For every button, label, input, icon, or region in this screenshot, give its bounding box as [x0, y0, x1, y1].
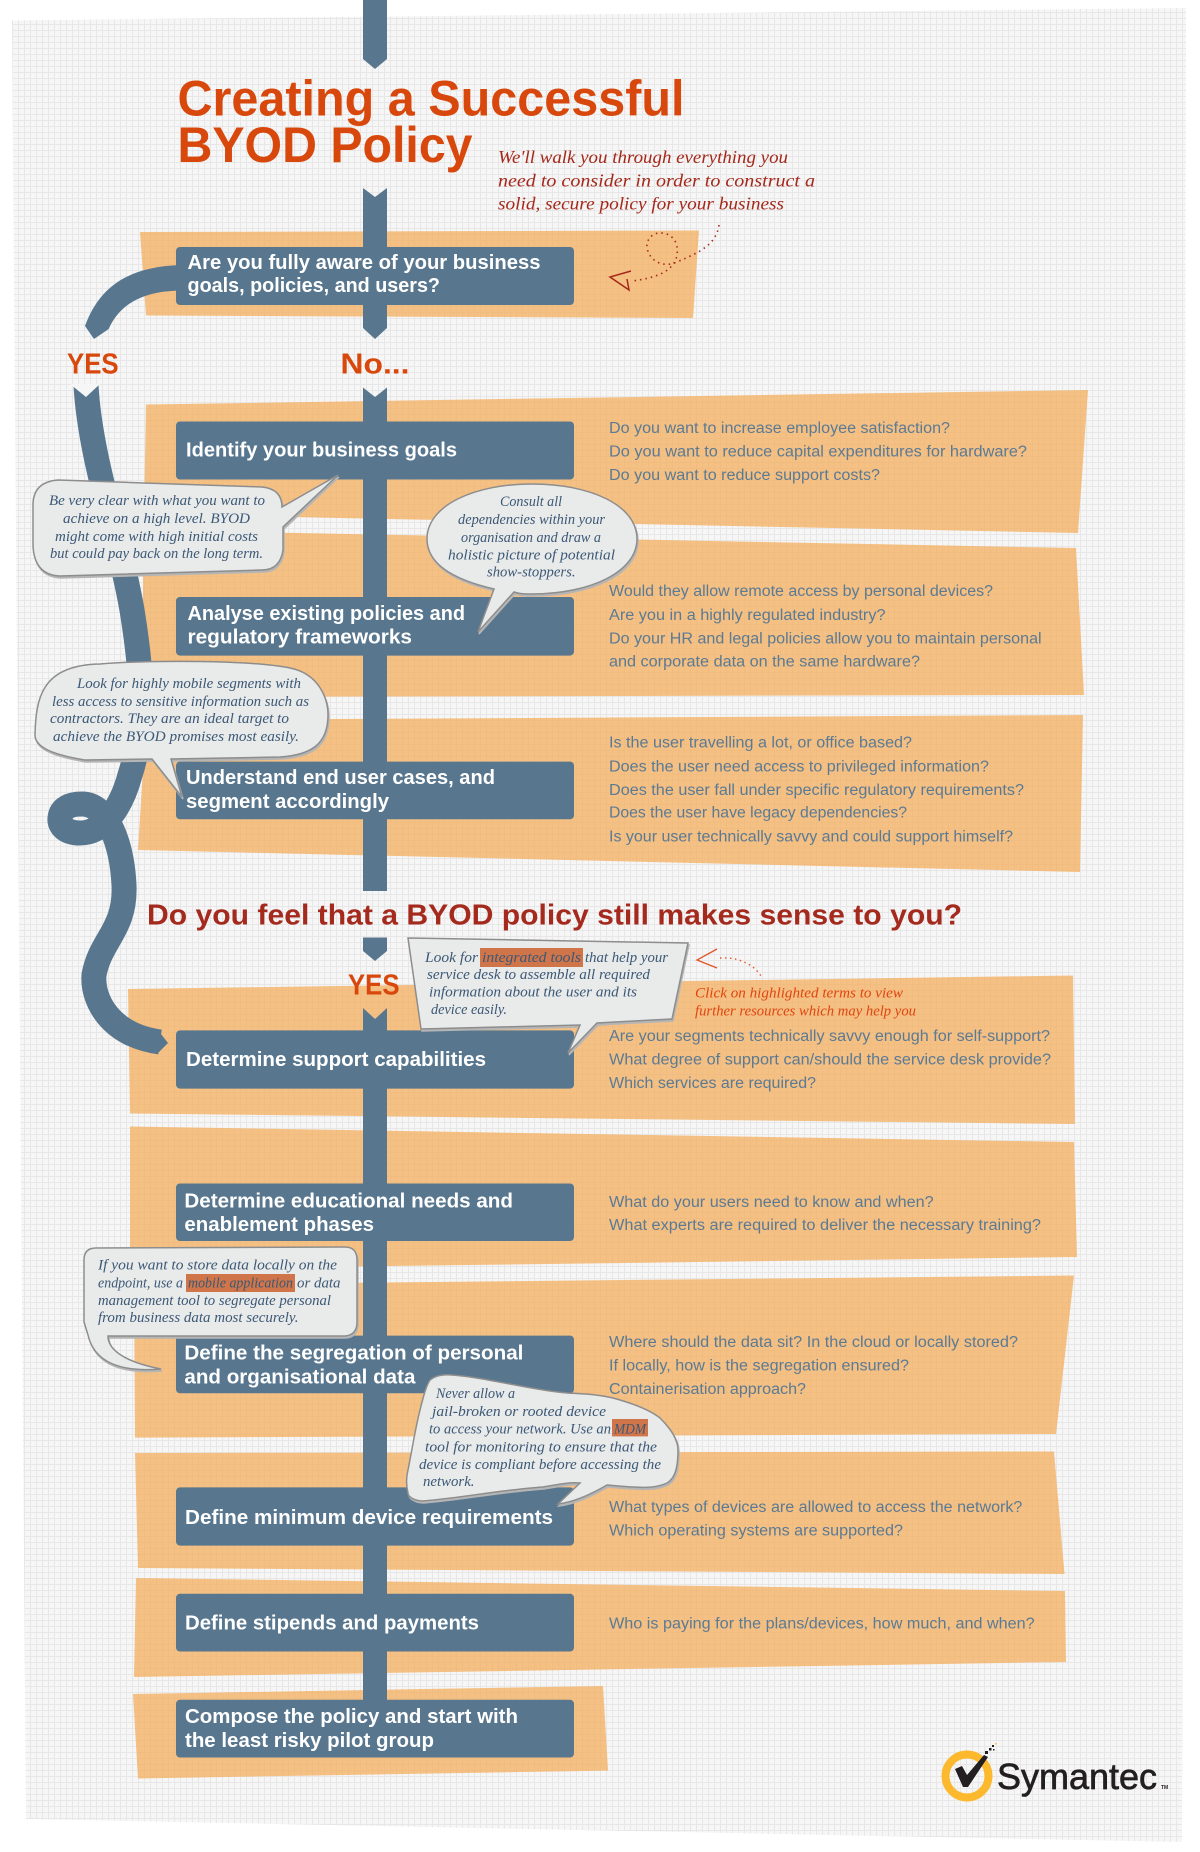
step box: end user cases: segment accordingly: [186, 791, 390, 813]
callout: integrated tools: device easily.: [431, 1002, 507, 1018]
panel: device requirements backing: [135, 1452, 1064, 1574]
step box: compose policy: the least risky pilot group: [185, 1730, 434, 1752]
questions: devices: Which operating systems are supported?: [609, 1522, 903, 1539]
intro handwritten text: need to consider in order to construct a: [498, 171, 815, 191]
highlight: mobile application: [186, 1274, 295, 1292]
callout: local data storage: from business data most securely.: [98, 1310, 298, 1326]
callout: never allow jail-broken device: tool for monitoring to ensure that the: [425, 1440, 657, 1456]
heading: decision question: Do you feel that a BYOD policy still makes sense to you?: [147, 900, 962, 932]
callout: local data storage: mobile application: [188, 1275, 293, 1291]
questions: stipends: Who is paying for the plans/devices, how much, and when?: [609, 1616, 1035, 1633]
questions: education: What experts are required to deliver the necessary training?: [609, 1217, 1041, 1234]
callout: consult all dependencies: dependencies within your: [458, 512, 605, 528]
icon: dotted looping arrow: [610, 225, 719, 290]
title: [178, 70, 684, 173]
panel: data segregation backing: [134, 1276, 1074, 1438]
callout: consult all dependencies: [427, 484, 637, 632]
note: click on highlighted terms: Click on highlighted terms to view: [695, 986, 903, 1002]
label: YES: YES: [67, 349, 119, 381]
panel: educational needs backing: [130, 1126, 1077, 1270]
arrow: title to first question: [363, 188, 387, 339]
callout: be very clear: but could pay back on the long term.: [50, 546, 263, 562]
callout: integrated tools: [408, 938, 688, 1053]
arrow: into yes label: [363, 938, 387, 961]
questions: business goals: Do you want to reduce capital expenditures for hardware?: [609, 444, 1027, 461]
questions: policies: Would they allow remote access by personal devices?: [609, 583, 993, 600]
intro handwritten text: We'll walk you through everything you: [498, 147, 788, 167]
step box: educational needs: enablement phases: [184, 1214, 374, 1236]
questions: business goals: [609, 420, 1027, 484]
highlight: MDM: [612, 1419, 648, 1436]
questions: business goals: Do you want to increase employee satisfaction?: [609, 420, 950, 437]
callout: be very clear: achieve on a high level. BYOD: [63, 511, 250, 527]
callout: never allow jail-broken device: to access your network. Use an: [429, 1422, 611, 1438]
questions: end users: Does the user need access to privileged information?: [609, 758, 989, 775]
questions: data: Where should the data sit? In the cloud or locally stored?: [609, 1334, 1018, 1351]
step box: end user cases: Understand end user cases, and: [186, 767, 495, 789]
callout: highly mobile segments: achieve the BYOD promises most easily.: [53, 729, 299, 745]
questions: support: Which services are required?: [609, 1075, 816, 1092]
callout: integrated tools: Look for: [424, 950, 478, 966]
arrow: yes branch trunk: [363, 1008, 387, 1705]
icon: small dotted arrow: [697, 949, 761, 976]
questions: support: Are your segments technically savvy enough for self-support?: [609, 1028, 1050, 1045]
question box: business goals, policies, users: [176, 247, 574, 305]
callout: be very clear: might come with high initial costs: [55, 529, 258, 545]
step box: analyse policies: [176, 597, 574, 656]
step box: data segregation: [176, 1336, 574, 1393]
questions: end users: Is the user travelling a lot, or office based?: [609, 735, 912, 752]
questions: business goals: Do you want to reduce support costs?: [609, 467, 880, 484]
logo: Symantec: Symantec: [997, 1756, 1157, 1797]
intro handwritten text: [498, 147, 815, 214]
label: No...: No...: [340, 349, 410, 381]
intro handwritten text: solid, secure policy for your business: [498, 194, 784, 214]
questions: policies: and corporate data on the same hardware?: [609, 654, 920, 671]
callout: be very clear: [33, 475, 338, 576]
questions: end users: Does the user have legacy dependencies?: [609, 805, 907, 822]
questions: data: If locally, how is the segregation ensured?: [609, 1357, 909, 1374]
callout: never allow jail-broken device: network.: [423, 1474, 474, 1490]
title: BYOD Policy: [178, 117, 473, 173]
callout: local data storage: endpoint, use a: [98, 1275, 183, 1291]
panel: existing policies backing: [143, 530, 1084, 697]
callout: integrated tools: that help your: [585, 950, 668, 966]
step box: data segregation: and organisational data: [184, 1366, 416, 1388]
questions: data: [609, 1334, 1018, 1398]
callout: integrated tools: information about the user and its: [429, 984, 637, 1000]
step box: stipends and payments: [176, 1594, 574, 1652]
icon: yellow ring: [946, 1754, 988, 1798]
panel: compose policy backing: [133, 1686, 608, 1778]
highlight: integrated tools: [480, 948, 583, 967]
callout: highly mobile segments: Look for highly mobile segments with: [76, 676, 301, 692]
flow trunk arrows: [363, 0, 387, 1705]
callout: never allow jail-broken device: MDM: [613, 1422, 647, 1438]
questions: policies: Are you in a highly regulated industry?: [609, 607, 886, 624]
question box: business goals, policies, users: goals, policies, and users?: [188, 275, 440, 297]
step box: minimum device requirements: [176, 1487, 574, 1546]
questions: end users: Is your user technically savvy and could support himself?: [609, 828, 1013, 845]
step box: identify business goals: [176, 422, 574, 480]
panel: end user cases backing: [138, 715, 1083, 872]
callout: local data storage: [84, 1247, 357, 1370]
step box: analyse policies: regulatory frameworks: [188, 627, 412, 649]
step box: support capabilities: Determine support capabilities: [186, 1049, 486, 1071]
callout: highly mobile segments: contractors. They are an ideal target to: [50, 711, 289, 727]
callout: never allow jail-broken device: Never allow a: [435, 1386, 515, 1402]
questions: education: [609, 1194, 1041, 1234]
callout: integrated tools: integrated tools: [482, 950, 581, 966]
step box: analyse policies: Analyse existing policies and: [188, 603, 465, 625]
question box: business goals, policies, users: Are you fully aware of your business: [188, 252, 540, 274]
arrow: yes branch arm from first question: [85, 265, 180, 339]
logo: Symantec: TM: [1161, 1785, 1168, 1791]
callout: never allow jail-broken device: [406, 1375, 678, 1504]
callout: be very clear: Be very clear with what you want to: [49, 493, 265, 509]
orange step panels: [128, 230, 1088, 1778]
arrow: long yes branch with loop: [60, 384, 168, 1054]
label: YES after decision: YES: [348, 970, 400, 1002]
questions: data: Containerisation approach?: [609, 1381, 806, 1398]
step box: stipends and payments: Define stipends and payments: [185, 1612, 479, 1634]
callout: local data storage: management tool to segregate personal: [98, 1293, 331, 1309]
step box: end user cases: [176, 762, 574, 819]
questions: education: What do your users need to know and when?: [609, 1194, 934, 1211]
step box: compose policy: [176, 1700, 574, 1758]
callout: highly mobile segments: [35, 661, 328, 797]
callout: consult all dependencies: show-stoppers.: [487, 564, 576, 580]
callout: local data storage: If you want to store data locally on the: [97, 1258, 337, 1274]
arrow: no branch trunk: [363, 388, 387, 891]
questions: policies: [609, 583, 1042, 671]
callout: consult all dependencies: holistic picture of potential: [448, 548, 615, 564]
callout: consult all dependencies: Consult all: [500, 494, 562, 510]
panel: awareness question backing: [140, 230, 699, 318]
step box: educational needs: [176, 1184, 574, 1241]
arrow: entry into title: [363, 0, 387, 69]
logo: Symantec: [946, 1743, 1168, 1798]
note: click on highlighted terms: [695, 986, 916, 1019]
panel: business goals backing: [144, 390, 1088, 533]
callout: integrated tools: service desk to assemble all required: [427, 967, 650, 983]
panel: support capabilities backing: [128, 976, 1075, 1124]
step box: data segregation: Define the segregation of personal: [184, 1343, 523, 1365]
callout: never allow jail-broken device: jail-broken or rooted device: [430, 1404, 606, 1420]
title: Creating a Successful: [178, 70, 684, 126]
questions: policies: Do your HR and legal policies allow you to maintain personal: [609, 631, 1042, 648]
step box: compose policy: Compose the policy and start with: [185, 1706, 518, 1728]
questions: end users: [609, 735, 1024, 845]
callout: local data storage: or data: [297, 1275, 340, 1291]
questions: support: What degree of support can/should the service desk provide?: [609, 1051, 1051, 1068]
step box: identify business goals: Identify your business goals: [186, 440, 457, 462]
questions: devices: [609, 1499, 1023, 1539]
questions: devices: What types of devices are allowed to access the network?: [609, 1499, 1023, 1516]
callout: consult all dependencies: organisation and draw a: [461, 530, 601, 546]
questions: support: [609, 1028, 1051, 1092]
step box: minimum device requirements: Define minimum device requirements: [185, 1507, 553, 1529]
note: click on highlighted terms: further resources which may help you: [695, 1003, 916, 1019]
questions: end users: Does the user fall under specific regulatory requirements?: [609, 782, 1024, 799]
step box: support capabilities: [176, 1030, 574, 1089]
callout: highly mobile segments: less access to sensitive information such as: [52, 694, 309, 710]
icon: check mark: [955, 1755, 988, 1787]
panel: stipends backing: [134, 1578, 1066, 1677]
step box: educational needs: Determine educational needs and: [184, 1191, 513, 1213]
callout: never allow jail-broken device: device is compliant before accessing the: [419, 1457, 661, 1473]
icon: pixel dots: [985, 1743, 996, 1754]
